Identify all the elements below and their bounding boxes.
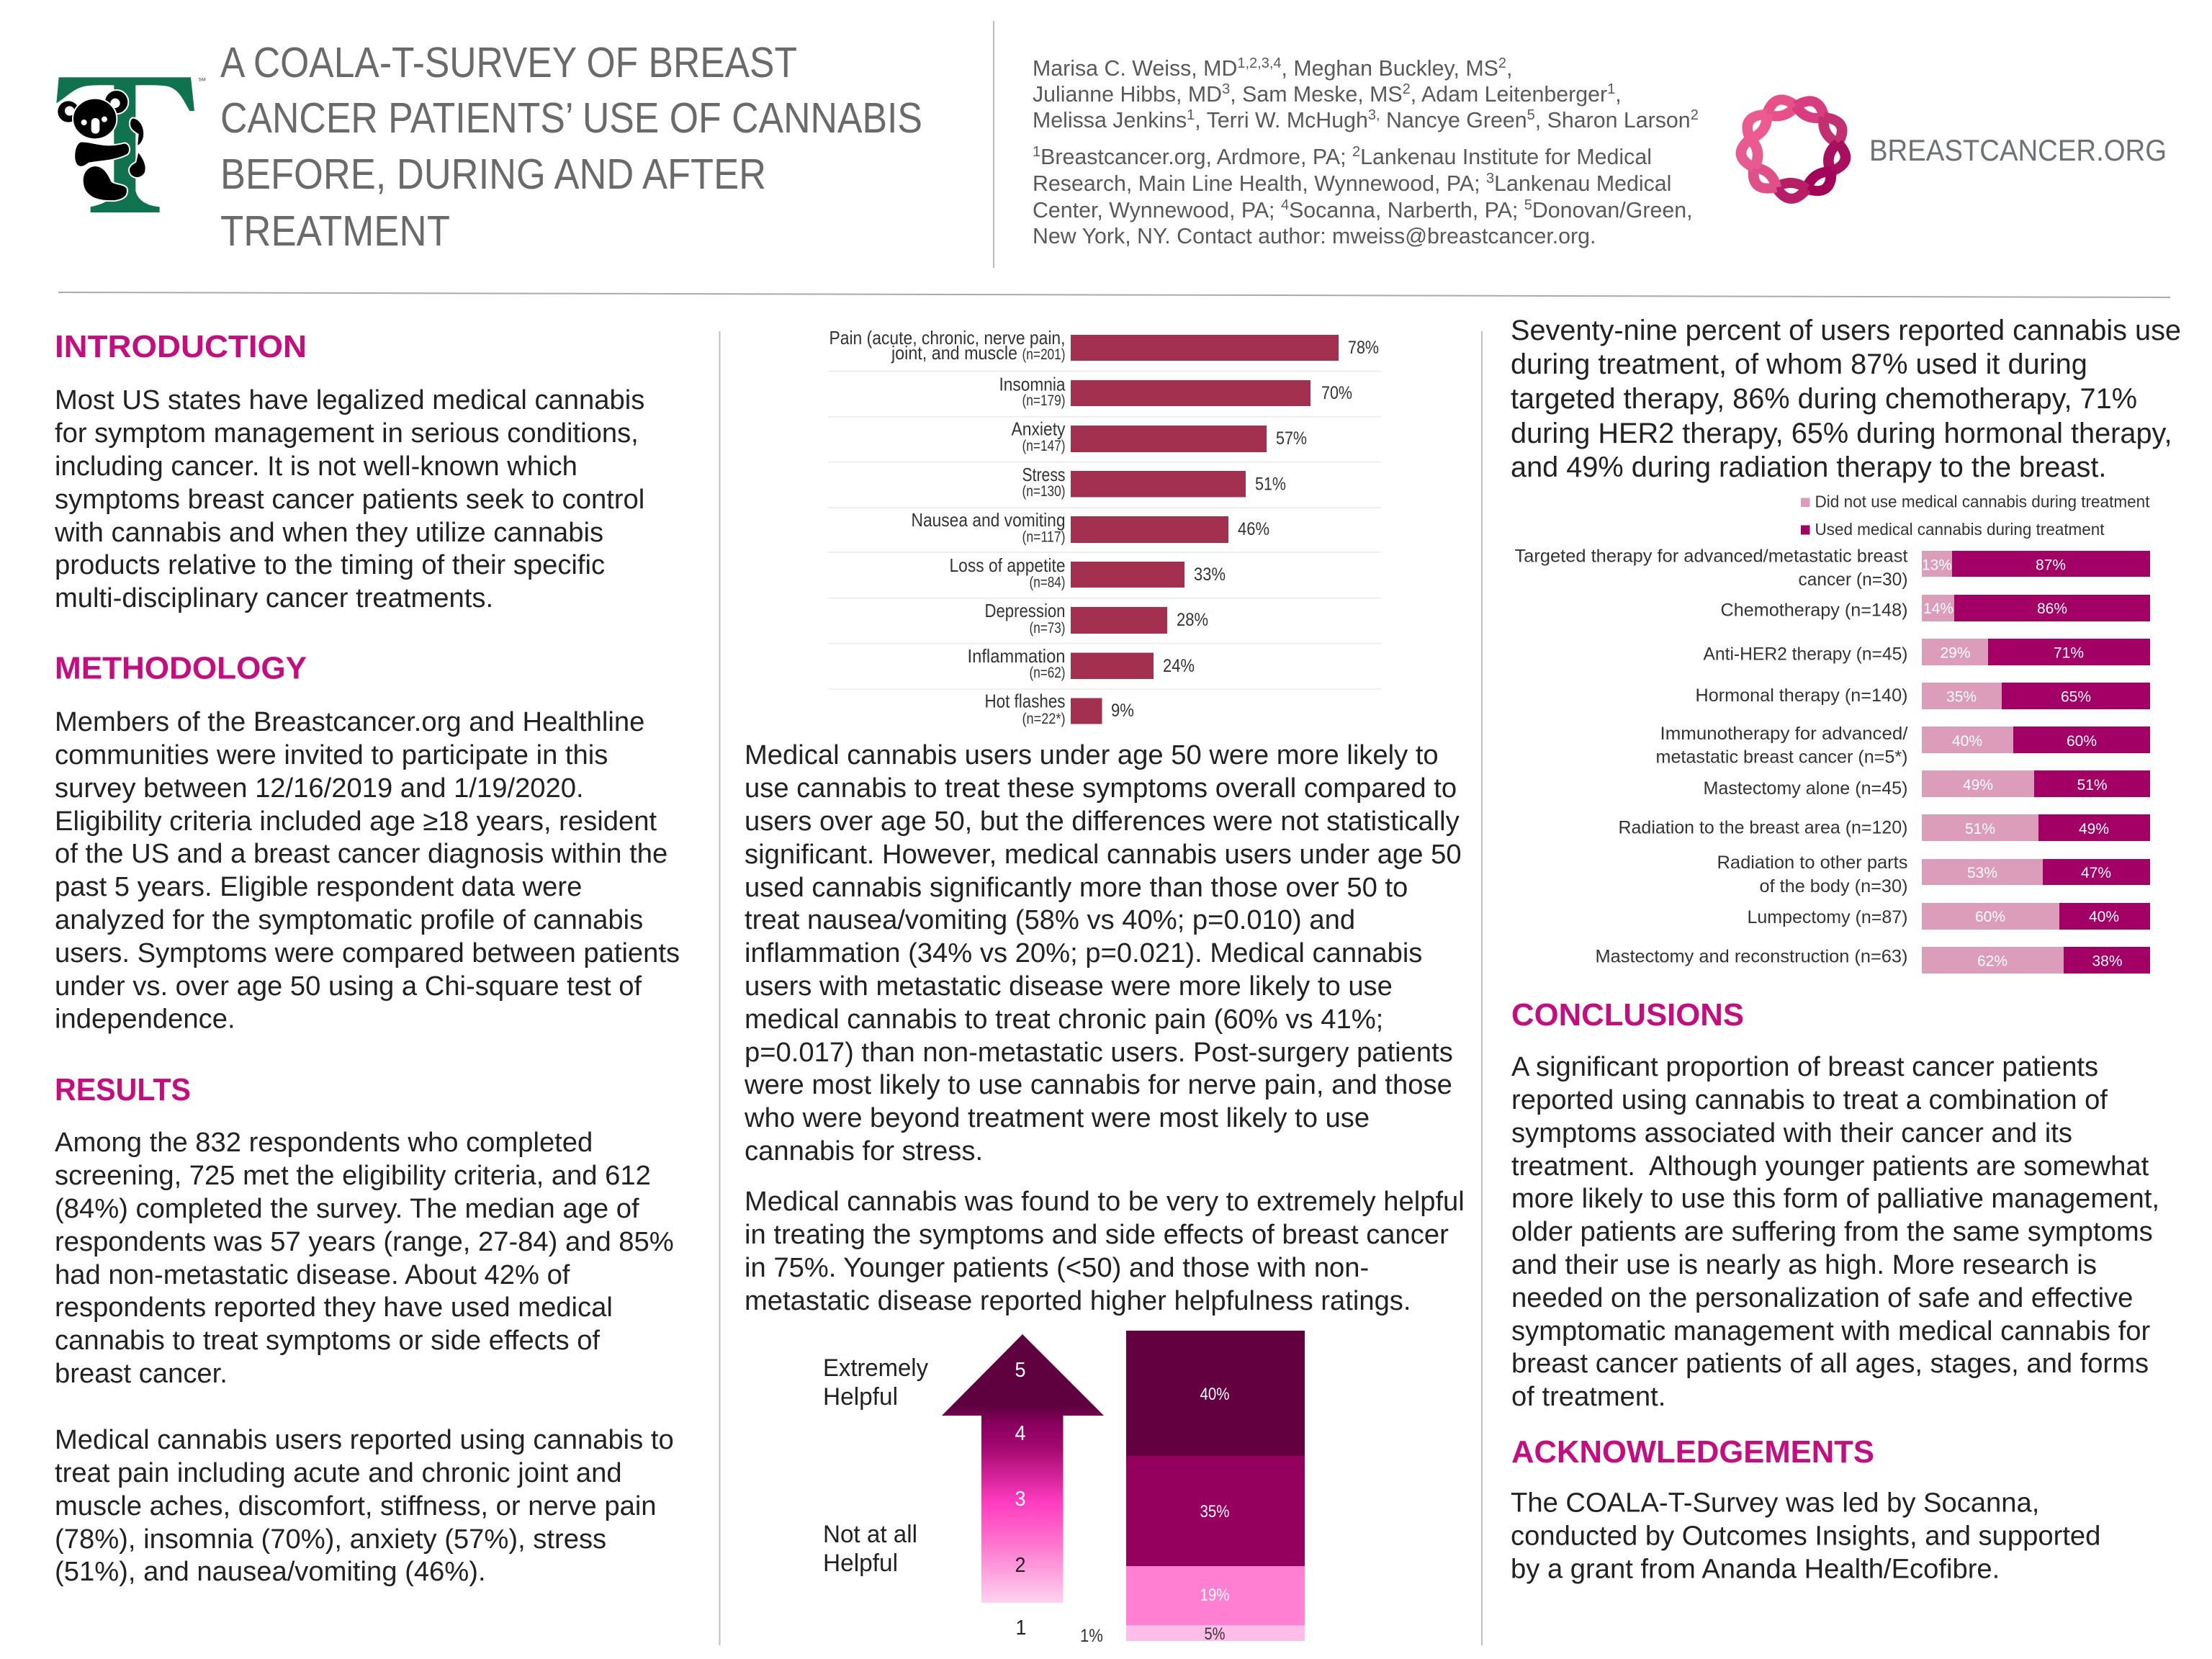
stacked bar chart: treatments: cancer (n=30) <box>1799 570 1908 590</box>
title: TREATMENT <box>220 207 450 255</box>
bar chart: symptoms: 78% <box>1348 338 1379 358</box>
text: methodology: Eligibility criteria included age ≥18 years, resident <box>55 806 657 837</box>
text: results: muscle aches, discomfort, stiffness, or nerve pain <box>55 1491 657 1521</box>
stacked bar chart: treatments: 62% <box>1977 953 2008 969</box>
stacked bar chart: treatments: Targeted therapy for advanced/metastatic breast <box>1515 546 1908 566</box>
stacked bar chart: treatments: 47% <box>2081 865 2111 881</box>
text: age and metastatic findings: users over age 50, but the differences were not statistically <box>745 806 1460 837</box>
text: methodology: communities were invited to participate in this <box>55 739 608 770</box>
text: acknowledgements: The COALA-T-Survey was led by Socanna, <box>1511 1488 2039 1518</box>
affiliations: Socanna, Narberth, PA; <box>1289 199 1524 222</box>
stacked bar chart: treatments: 87% <box>2036 557 2066 573</box>
text: conclusions: treatment. Although younger patients are somewhat <box>1511 1151 2149 1182</box>
bar chart: symptoms: 51% <box>1255 474 1286 494</box>
text: introduction: Most US states have legalized medical cannabis <box>55 385 644 415</box>
text: conclusions: older patients are suffering from the same symptoms <box>1511 1216 2153 1247</box>
text: methodology: Members of the Breastcancer.org and Healthline <box>55 706 644 737</box>
text: treatment timing: targeted therapy, 86% during chemotherapy, 71% <box>1511 383 2137 415</box>
title <box>220 39 922 255</box>
heading: methodology: METHODOLOGY <box>55 651 307 685</box>
stacked bar: helpfulness: 40% <box>1200 1385 1230 1404</box>
text: results <box>55 1127 674 1587</box>
text: acknowledgements <box>1511 1488 2100 1584</box>
text: age and metastatic findings: treat nausea/vomiting (58% vs 40%; p=0.010) and <box>745 904 1355 935</box>
text: age and metastatic findings <box>744 739 1462 1166</box>
affiliations: Breastcancer.org, Ardmore, PA; <box>1040 145 1352 169</box>
title: A COALA-T-SURVEY OF BREAST <box>220 39 797 86</box>
stacked bar chart: treatments: metastatic breast cancer (n=5*) <box>1656 747 1908 768</box>
text: introduction: symptoms breast cancer patients seek to control <box>55 484 644 515</box>
affiliations: Center, Wynnewood, PA; <box>1033 199 1274 222</box>
authors: , Terri W. McHugh <box>1195 109 1368 132</box>
text: conclusions: and their use is nearly as high. More research is <box>1511 1249 2097 1280</box>
stacked bar chart: treatments: 38% <box>2092 953 2123 969</box>
bar chart: symptoms: 24% <box>1163 656 1195 676</box>
bar chart: symptoms: (n=147) <box>1022 438 1066 454</box>
authors: 5 <box>1527 107 1535 123</box>
stacked bar chart: treatments: 14% <box>1923 601 1954 617</box>
affiliations: 3 <box>1486 171 1494 186</box>
text: age and metastatic findings: used cannabis significantly more than those over 50 to <box>745 872 1408 903</box>
bar chart: symptoms: (n=130) <box>1022 483 1066 500</box>
stacked bar chart: treatments: 35% <box>1946 688 1977 706</box>
text: introduction: with cannabis and when they utilize cannabis <box>54 517 603 548</box>
text: helpfulness: in 75%. Younger patients (<50) and those with non- <box>745 1252 1369 1283</box>
text: helpfulness: Medical cannabis was found to be very to extremely helpful <box>745 1186 1465 1217</box>
bar chart: symptoms: Insomnia <box>999 373 1066 395</box>
text: results: (78%), insomnia (70%), anxiety (57%), stress <box>55 1524 606 1555</box>
authors: 3 <box>1222 81 1230 97</box>
stacked bar chart: treatments: 40% <box>1952 733 1982 750</box>
authors: 1,2,3,4 <box>1237 55 1282 71</box>
affiliations <box>1033 144 1693 248</box>
affiliations: Donovan/Green, <box>1532 199 1693 222</box>
text: introduction: for symptom management in serious conditions, <box>55 418 639 449</box>
affiliations: 4 <box>1281 197 1289 213</box>
authors: 1 <box>1187 107 1195 123</box>
text: acknowledgements: conducted by Outcomes Insights, and supported <box>1511 1521 2100 1551</box>
stacked bar chart: treatments: Mastectomy and reconstruction (n=63) <box>1596 946 1908 966</box>
bar chart: symptoms: (n=22*) <box>1022 711 1066 727</box>
bar chart: symptoms <box>828 327 1381 727</box>
text: acknowledgements: by a grant from Ananda Health/Ecofibre. <box>1511 1554 2000 1584</box>
stacked bar chart: treatments: 13% <box>1922 557 1952 573</box>
legend: treatment chart: Used medical cannabis during treatment <box>1815 520 2105 539</box>
stacked bar: helpfulness: 35% <box>1200 1502 1230 1521</box>
bar chart: symptoms: 46% <box>1238 519 1269 539</box>
text: age and metastatic findings: cannabis for stress. <box>745 1136 983 1166</box>
text: age and metastatic findings: significant. However, medical cannabis users under age 50 <box>745 839 1462 870</box>
text: results: had non-metastatic disease. About 42% of <box>55 1259 570 1290</box>
stacked bar chart: treatments: Immunotherapy for advanced/ <box>1660 724 1908 744</box>
logo: koala on green T <box>56 77 206 212</box>
text: conclusions: of treatment. <box>1511 1381 1665 1412</box>
text: treatment timing: Seventy-nine percent of users reported cannabis use <box>1511 315 2181 346</box>
stacked bar chart: treatments: Hormonal therapy (n=140) <box>1695 685 1908 706</box>
bar chart: symptoms: Hot flashes <box>985 690 1066 711</box>
text: conclusions: symptomatic management with medical cannabis for <box>1511 1316 2150 1346</box>
text: results: respondents reported they have used medical <box>55 1292 613 1323</box>
affiliations: New York, NY. Contact author: mweiss@breastcancer.org. <box>1033 225 1596 248</box>
text: introduction: products relative to the timing of their specific <box>55 549 605 580</box>
text: age and metastatic findings: medical cannabis to treat chronic pain (60% vs 41%; <box>745 1004 1383 1035</box>
text: introduction: including cancer. It is not well-known which <box>55 451 577 482</box>
stacked bar chart: treatments: 40% <box>2089 909 2119 925</box>
stacked bar chart: treatments: 29% <box>1940 645 1971 661</box>
affiliations: Lankenau Medical <box>1494 172 1671 196</box>
text: methodology: analyzed for the symptomatic profile of cannabis <box>55 904 643 935</box>
bar chart: symptoms: 28% <box>1177 610 1208 630</box>
logo: koala on green T: SM <box>199 77 206 82</box>
stacked bar chart: treatments: Lumpectomy (n=87) <box>1747 907 1908 927</box>
stacked bar chart: treatments: 51% <box>2077 777 2108 793</box>
authors: 1 <box>1607 81 1615 97</box>
text: treatment timing: during HER2 therapy, 65% during hormonal therapy, <box>1511 418 2172 449</box>
stacked bar chart: treatments: 49% <box>1963 777 1993 793</box>
bar chart: symptoms: Nausea and vomiting <box>912 509 1066 531</box>
stacked bar chart: treatments: Radiation to the breast area (n=120) <box>1619 818 1908 838</box>
bar chart: symptoms: Loss of appetite <box>949 554 1066 576</box>
authors: Melissa Jenkins <box>1033 109 1187 132</box>
arrow scale: helpfulness: 5 <box>1015 1359 1025 1382</box>
bar chart: symptoms: 33% <box>1194 565 1226 585</box>
authors: , Sam Meske, MS <box>1230 83 1403 107</box>
title: CANCER PATIENTS’ USE OF CANNABIS <box>220 94 922 142</box>
heading: introduction: INTRODUCTION <box>55 330 307 364</box>
arrow scale: helpfulness: 2 <box>1015 1554 1025 1577</box>
stacked bar: helpfulness: 5% <box>1204 1624 1226 1644</box>
authors: Marisa C. Weiss, MD <box>1033 57 1237 81</box>
bar chart: symptoms: Stress <box>1022 464 1066 485</box>
stacked bar chart: treatments <box>1515 546 2150 974</box>
affiliations: Lankenau Institute for Medical <box>1360 145 1652 169</box>
text: treatment timing <box>1511 315 2181 483</box>
bar chart: symptoms: joint, and muscle <box>891 342 1017 364</box>
text: conclusions: A significant proportion of breast cancer patients <box>1511 1051 2098 1082</box>
stacked bar: helpfulness: 1% <box>1080 1626 1103 1646</box>
bar chart: symptoms: 9% <box>1111 701 1134 721</box>
text: methodology: past 5 years. Eligible respondent data were <box>55 871 582 902</box>
authors: , <box>1506 57 1512 81</box>
text: results: treat pain including acute and chronic joint and <box>55 1457 622 1488</box>
text: age and metastatic findings: users with metastatic disease were more likely to use <box>745 971 1393 1002</box>
bar chart: symptoms: 57% <box>1276 428 1307 449</box>
text: conclusions: symptoms associated with their cancer and its <box>1511 1118 2072 1148</box>
bar chart: symptoms: 70% <box>1321 383 1352 403</box>
authors: 2 <box>1403 81 1411 97</box>
text: methodology: users. Symptoms were compared between patients <box>55 938 680 968</box>
stacked bar chart: treatments: 60% <box>1975 909 2005 925</box>
arrow scale: helpfulness: Extremely <box>823 1354 928 1382</box>
authors: Nancye Green <box>1380 109 1527 132</box>
bar chart: symptoms: (n=117) <box>1022 529 1066 546</box>
arrow scale: helpfulness: Not at all <box>823 1521 917 1548</box>
affiliations: 1 <box>1033 144 1040 160</box>
bar chart: symptoms: (n=84) <box>1030 575 1066 590</box>
stacked bar chart: treatments: Mastectomy alone (n=45) <box>1704 778 1908 799</box>
title: BEFORE, DURING AND AFTER <box>220 150 766 198</box>
authors: 2 <box>1691 107 1699 123</box>
text: age and metastatic findings: were most likely to use cannabis for nerve pain, and those <box>744 1069 1452 1100</box>
bar chart: symptoms: Inflammation <box>968 645 1066 667</box>
bar chart: symptoms: Depression <box>985 600 1066 621</box>
authors: 2 <box>1498 55 1506 71</box>
text: results: respondents was 57 years (range, 27-84) and 85% <box>55 1226 674 1257</box>
text: results: cannabis to treat symptoms or side effects of <box>55 1325 600 1356</box>
text: methodology: survey between 12/16/2019 and 1/19/2020. <box>55 773 584 804</box>
stacked bar chart: treatments: of the body (n=30) <box>1760 876 1908 896</box>
stacked bar chart: treatments: Radiation to other parts <box>1717 853 1908 873</box>
text: results: Among the 832 respondents who completed <box>55 1127 593 1158</box>
stacked bar chart: treatments: Chemotherapy (n=148) <box>1721 601 1908 621</box>
text: methodology <box>55 706 680 1034</box>
authors: 3, <box>1368 107 1380 123</box>
affiliations: Research, Main Line Health, Wynnewood, PA; <box>1033 172 1480 196</box>
stacked bar chart: treatments: 53% <box>1967 865 1997 881</box>
legend: treatment chart: Did not use medical cannabis during treatment <box>1815 493 2150 511</box>
text: methodology: under vs. over age 50 using a Chi-square test of <box>55 971 642 1002</box>
text: conclusions: breast cancer patients of all ages, stages, and forms <box>1511 1348 2149 1379</box>
text: results: breast cancer. <box>55 1358 228 1389</box>
text: age and metastatic findings: p=0.017) than non-metastatic users. Post-surgery patients <box>745 1037 1453 1068</box>
arrow scale: helpfulness: 3 <box>1015 1488 1025 1511</box>
bar chart: symptoms: (n=73) <box>1030 620 1066 637</box>
heading: conclusions: CONCLUSIONS <box>1511 998 1744 1033</box>
stacked bar chart: treatments: 86% <box>2037 601 2067 617</box>
arrow scale: helpfulness <box>823 1334 1104 1640</box>
affiliations: 2 <box>1352 144 1360 160</box>
stacked bar chart: treatments: 49% <box>2079 821 2109 837</box>
text: methodology: independence. <box>55 1004 235 1034</box>
stacked bar: helpfulness <box>1080 1331 1305 1646</box>
text: introduction <box>54 385 644 613</box>
heading: results: RESULTS <box>55 1073 191 1107</box>
text: results: screening, 725 met the eligibility criteria, and 612 <box>55 1160 651 1191</box>
arrow scale: helpfulness: Helpful <box>823 1550 898 1577</box>
text: results: (84%) completed the survey. The median age of <box>55 1193 639 1224</box>
logo: breastcancer.org ribbon ring <box>1739 96 1848 199</box>
stacked bar chart: treatments: Anti-HER2 therapy (n=45) <box>1704 644 1908 664</box>
arrow scale: helpfulness: 1 <box>1015 1617 1027 1640</box>
text: helpfulness: metastatic disease reported higher helpfulness ratings. <box>745 1285 1411 1316</box>
stacked bar chart: treatments: 65% <box>2061 688 2091 706</box>
bar chart: symptoms: (n=62) <box>1030 665 1066 681</box>
authors: , Sharon Larson <box>1535 109 1691 132</box>
heading: acknowledgements: ACKNOWLEDGEMENTS <box>1511 1435 1874 1470</box>
authors: , <box>1615 83 1622 107</box>
logo wordmark: BREASTCANCER.ORG <box>1869 133 2167 167</box>
text: age and metastatic findings: inflammation (34% vs 20%; p=0.021). Medical cannabis <box>745 938 1422 968</box>
bar chart: symptoms: (n=201) <box>1022 346 1066 363</box>
text: age and metastatic findings: use cannabis to treat these symptoms overall compared to <box>745 773 1457 804</box>
text: conclusions: reported using cannabis to treat a combination of <box>1511 1084 2108 1115</box>
stacked bar: helpfulness: 19% <box>1200 1586 1230 1605</box>
text: helpfulness <box>745 1186 1465 1316</box>
text: treatment timing: during treatment, of whom 87% used it during <box>1511 349 2087 380</box>
text: methodology: of the US and a breast cancer diagnosis within the <box>55 838 667 869</box>
text: age and metastatic findings: Medical cannabis users under age 50 were more likely to <box>745 739 1439 770</box>
text: results: (51%), and nausea/vomiting (46%). <box>55 1556 486 1587</box>
text: introduction: multi-disciplinary cancer treatments. <box>55 583 493 613</box>
bar chart: symptoms: Pain (acute, chronic, nerve pain, <box>830 327 1066 349</box>
authors: , Adam Leitenberger <box>1411 83 1607 107</box>
authors <box>1033 55 1699 132</box>
text: helpfulness: in treating the symptoms and side effects of breast cancer <box>745 1219 1449 1250</box>
text: age and metastatic findings: who were beyond treatment were most likely to use <box>744 1102 1370 1133</box>
arrow scale: helpfulness: Helpful <box>823 1383 898 1411</box>
legend: treatment chart <box>1801 493 2150 539</box>
stacked bar chart: treatments: 60% <box>2067 733 2097 750</box>
stacked bar chart: treatments: 71% <box>2054 645 2084 661</box>
text: conclusions: more likely to use this form of palliative management, <box>1511 1183 2159 1214</box>
arrow scale: helpfulness: 4 <box>1015 1422 1025 1445</box>
text: results: Medical cannabis users reported using cannabis to <box>55 1424 674 1455</box>
stacked bar chart: treatments: 51% <box>1965 821 1995 837</box>
authors: Julianne Hibbs, MD <box>1033 83 1222 107</box>
text: conclusions <box>1511 1051 2159 1412</box>
bar chart: symptoms: (n=179) <box>1022 392 1066 409</box>
text: treatment timing: and 49% during radiation therapy to the breast. <box>1511 451 2106 483</box>
authors: , Meghan Buckley, MS <box>1282 57 1498 81</box>
affiliations: 5 <box>1524 197 1532 213</box>
bar chart: symptoms: Anxiety <box>1011 418 1066 439</box>
text: conclusions: needed on the personalization of safe and effective <box>1511 1282 2133 1313</box>
